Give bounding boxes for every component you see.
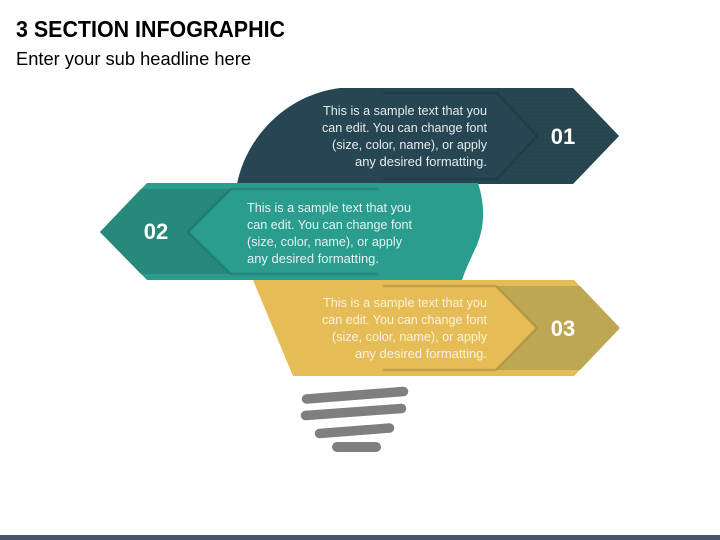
panel 01 shape	[237, 88, 619, 184]
panel 02 text: This is a sample text that you	[247, 201, 411, 215]
panel 03 text: can edit. You can change font	[322, 313, 487, 327]
panel 03 shape	[253, 280, 620, 376]
panel 01 textured arrow	[500, 93, 619, 179]
panel: section 01	[237, 88, 619, 184]
icon: light bulb base	[306, 392, 404, 447]
panel 02 chevron shadow	[188, 189, 378, 274]
title: 3 SECTION INFOGRAPHIC	[16, 16, 285, 42]
panel 03 chevron shadow	[383, 286, 537, 370]
panel: section 02	[100, 183, 483, 280]
panel 03 text: any desired formatting.	[355, 347, 487, 361]
panel 01 text: This is a sample text that you	[323, 104, 487, 118]
panel 01 text: any desired formatting.	[355, 155, 487, 169]
number 02: 02	[144, 219, 168, 244]
number 03: 03	[551, 316, 575, 341]
panel 01 text: (size, color, name), or apply	[332, 138, 488, 152]
panel: section 03	[253, 280, 620, 376]
panel 02 text: any desired formatting.	[247, 252, 379, 266]
subtitle: Enter your sub headline here	[16, 49, 251, 69]
panel 01 chevron shadow	[383, 93, 537, 179]
panel 01 text: can edit. You can change font	[322, 121, 487, 135]
panel 02 shape	[100, 183, 483, 280]
footer bar	[0, 535, 720, 540]
panel 03 dark arrow	[496, 286, 620, 370]
panel 02 dark arrow	[100, 189, 231, 274]
panel 02 text: can edit. You can change font	[247, 218, 412, 232]
panel 02 text: (size, color, name), or apply	[247, 235, 403, 249]
panel 03 text: (size, color, name), or apply	[332, 330, 488, 344]
number 01: 01	[551, 124, 575, 149]
panel 03 text: This is a sample text that you	[323, 296, 487, 310]
